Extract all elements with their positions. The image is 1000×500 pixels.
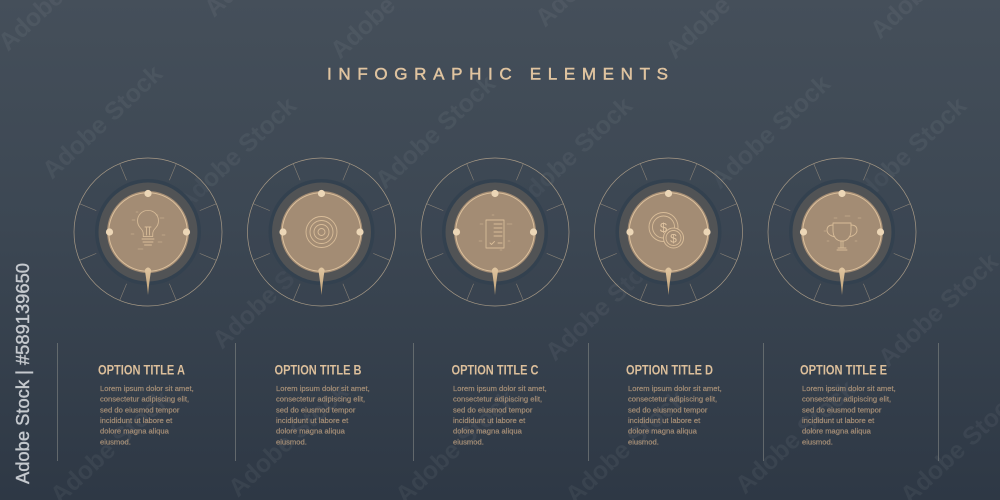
column A text [98, 362, 194, 446]
column B text: dolore magna aliqua [276, 427, 346, 436]
column C text: eiusmod. [453, 437, 484, 446]
column B text: consectetur adipiscing elit, [276, 395, 365, 404]
dial E: trophy [768, 158, 916, 306]
column E text [800, 362, 896, 446]
watermark pattern: Adobe Stock [540, 242, 671, 366]
column C text: OPTION TITLE C [452, 362, 539, 378]
dial C: document [421, 158, 569, 306]
watermark pattern: Adobe Stock [207, 230, 338, 354]
dial A: lightbulb [74, 158, 222, 306]
column D text: incididunt ut labore et [628, 416, 701, 425]
icon: coins: $ [660, 220, 668, 235]
column C text: sed do eiusmod tempor [453, 405, 533, 414]
column E text: Lorem ipsum dolor sit amet, [802, 384, 896, 393]
column B text: sed do eiusmod tempor [276, 405, 356, 414]
column E text: incididunt ut labore et [802, 416, 875, 425]
title: INFOGRAPHIC ELEMENTS [327, 64, 668, 84]
watermark pattern: Adobe Stock [705, 70, 836, 194]
watermark pattern: Adobe Stock [223, 378, 354, 500]
watermark pattern: Adobe Stock [507, 92, 638, 216]
column B text: OPTION TITLE B [274, 362, 362, 378]
column A text: dolore magna aliqua [100, 427, 170, 436]
column dividers [58, 343, 938, 461]
column A text: sed do eiusmod tempor [100, 405, 180, 414]
column D text: OPTION TITLE D [626, 362, 713, 378]
column B text: incididunt ut labore et [276, 416, 349, 425]
column E text: sed do eiusmod tempor [802, 405, 882, 414]
icon: lightbulb [131, 210, 165, 249]
column A text: consectetur adipiscing elit, [100, 395, 189, 404]
column D text: consectetur adipiscing elit, [628, 395, 717, 404]
column C text: consectetur adipiscing elit, [453, 395, 542, 404]
watermark pattern: Adobe Stock [37, 60, 168, 184]
column E text: OPTION TITLE E [800, 362, 887, 378]
column B text: eiusmod. [276, 437, 307, 446]
column C text: incididunt ut labore et [453, 416, 526, 425]
column D text [626, 362, 722, 446]
column C text: Lorem ipsum dolor sit amet, [453, 384, 547, 393]
icon: trophy [824, 216, 861, 250]
watermark pattern: Adobe Stock [171, 92, 302, 216]
watermark pattern: Adobe Stock [730, 375, 861, 499]
icon: coins: $ [670, 232, 677, 246]
dial D: coins [594, 158, 742, 306]
column D text: sed do eiusmod tempor [628, 405, 708, 414]
column A text: incididunt ut labore et [100, 416, 173, 425]
column C text [452, 362, 547, 446]
column B text: Lorem ipsum dolor sit amet, [276, 384, 370, 393]
icon: coins [649, 212, 684, 248]
column A text: eiusmod. [100, 437, 131, 446]
watermark pattern: Adobe Stock [841, 92, 972, 216]
column E text: consectetur adipiscing elit, [802, 395, 891, 404]
column D text: dolore magna aliqua [628, 427, 698, 436]
icon: document [479, 215, 512, 250]
column D text: Lorem ipsum dolor sit amet, [628, 384, 722, 393]
column E text: eiusmod. [802, 437, 833, 446]
column A text: Lorem ipsum dolor sit amet, [100, 384, 194, 393]
column C text: dolore magna aliqua [453, 427, 523, 436]
vertical stock id: Adobe Stock | #589139650 [13, 263, 33, 484]
watermark pattern: Adobe Stock [370, 70, 501, 194]
icon: target [306, 216, 337, 248]
column D text: eiusmod. [628, 437, 659, 446]
watermark pattern: Adobe Stock [873, 248, 1000, 372]
column A text: OPTION TITLE A [98, 362, 185, 378]
column B text [274, 362, 370, 446]
dial B: target [248, 158, 396, 306]
column E text: dolore magna aliqua [802, 427, 872, 436]
